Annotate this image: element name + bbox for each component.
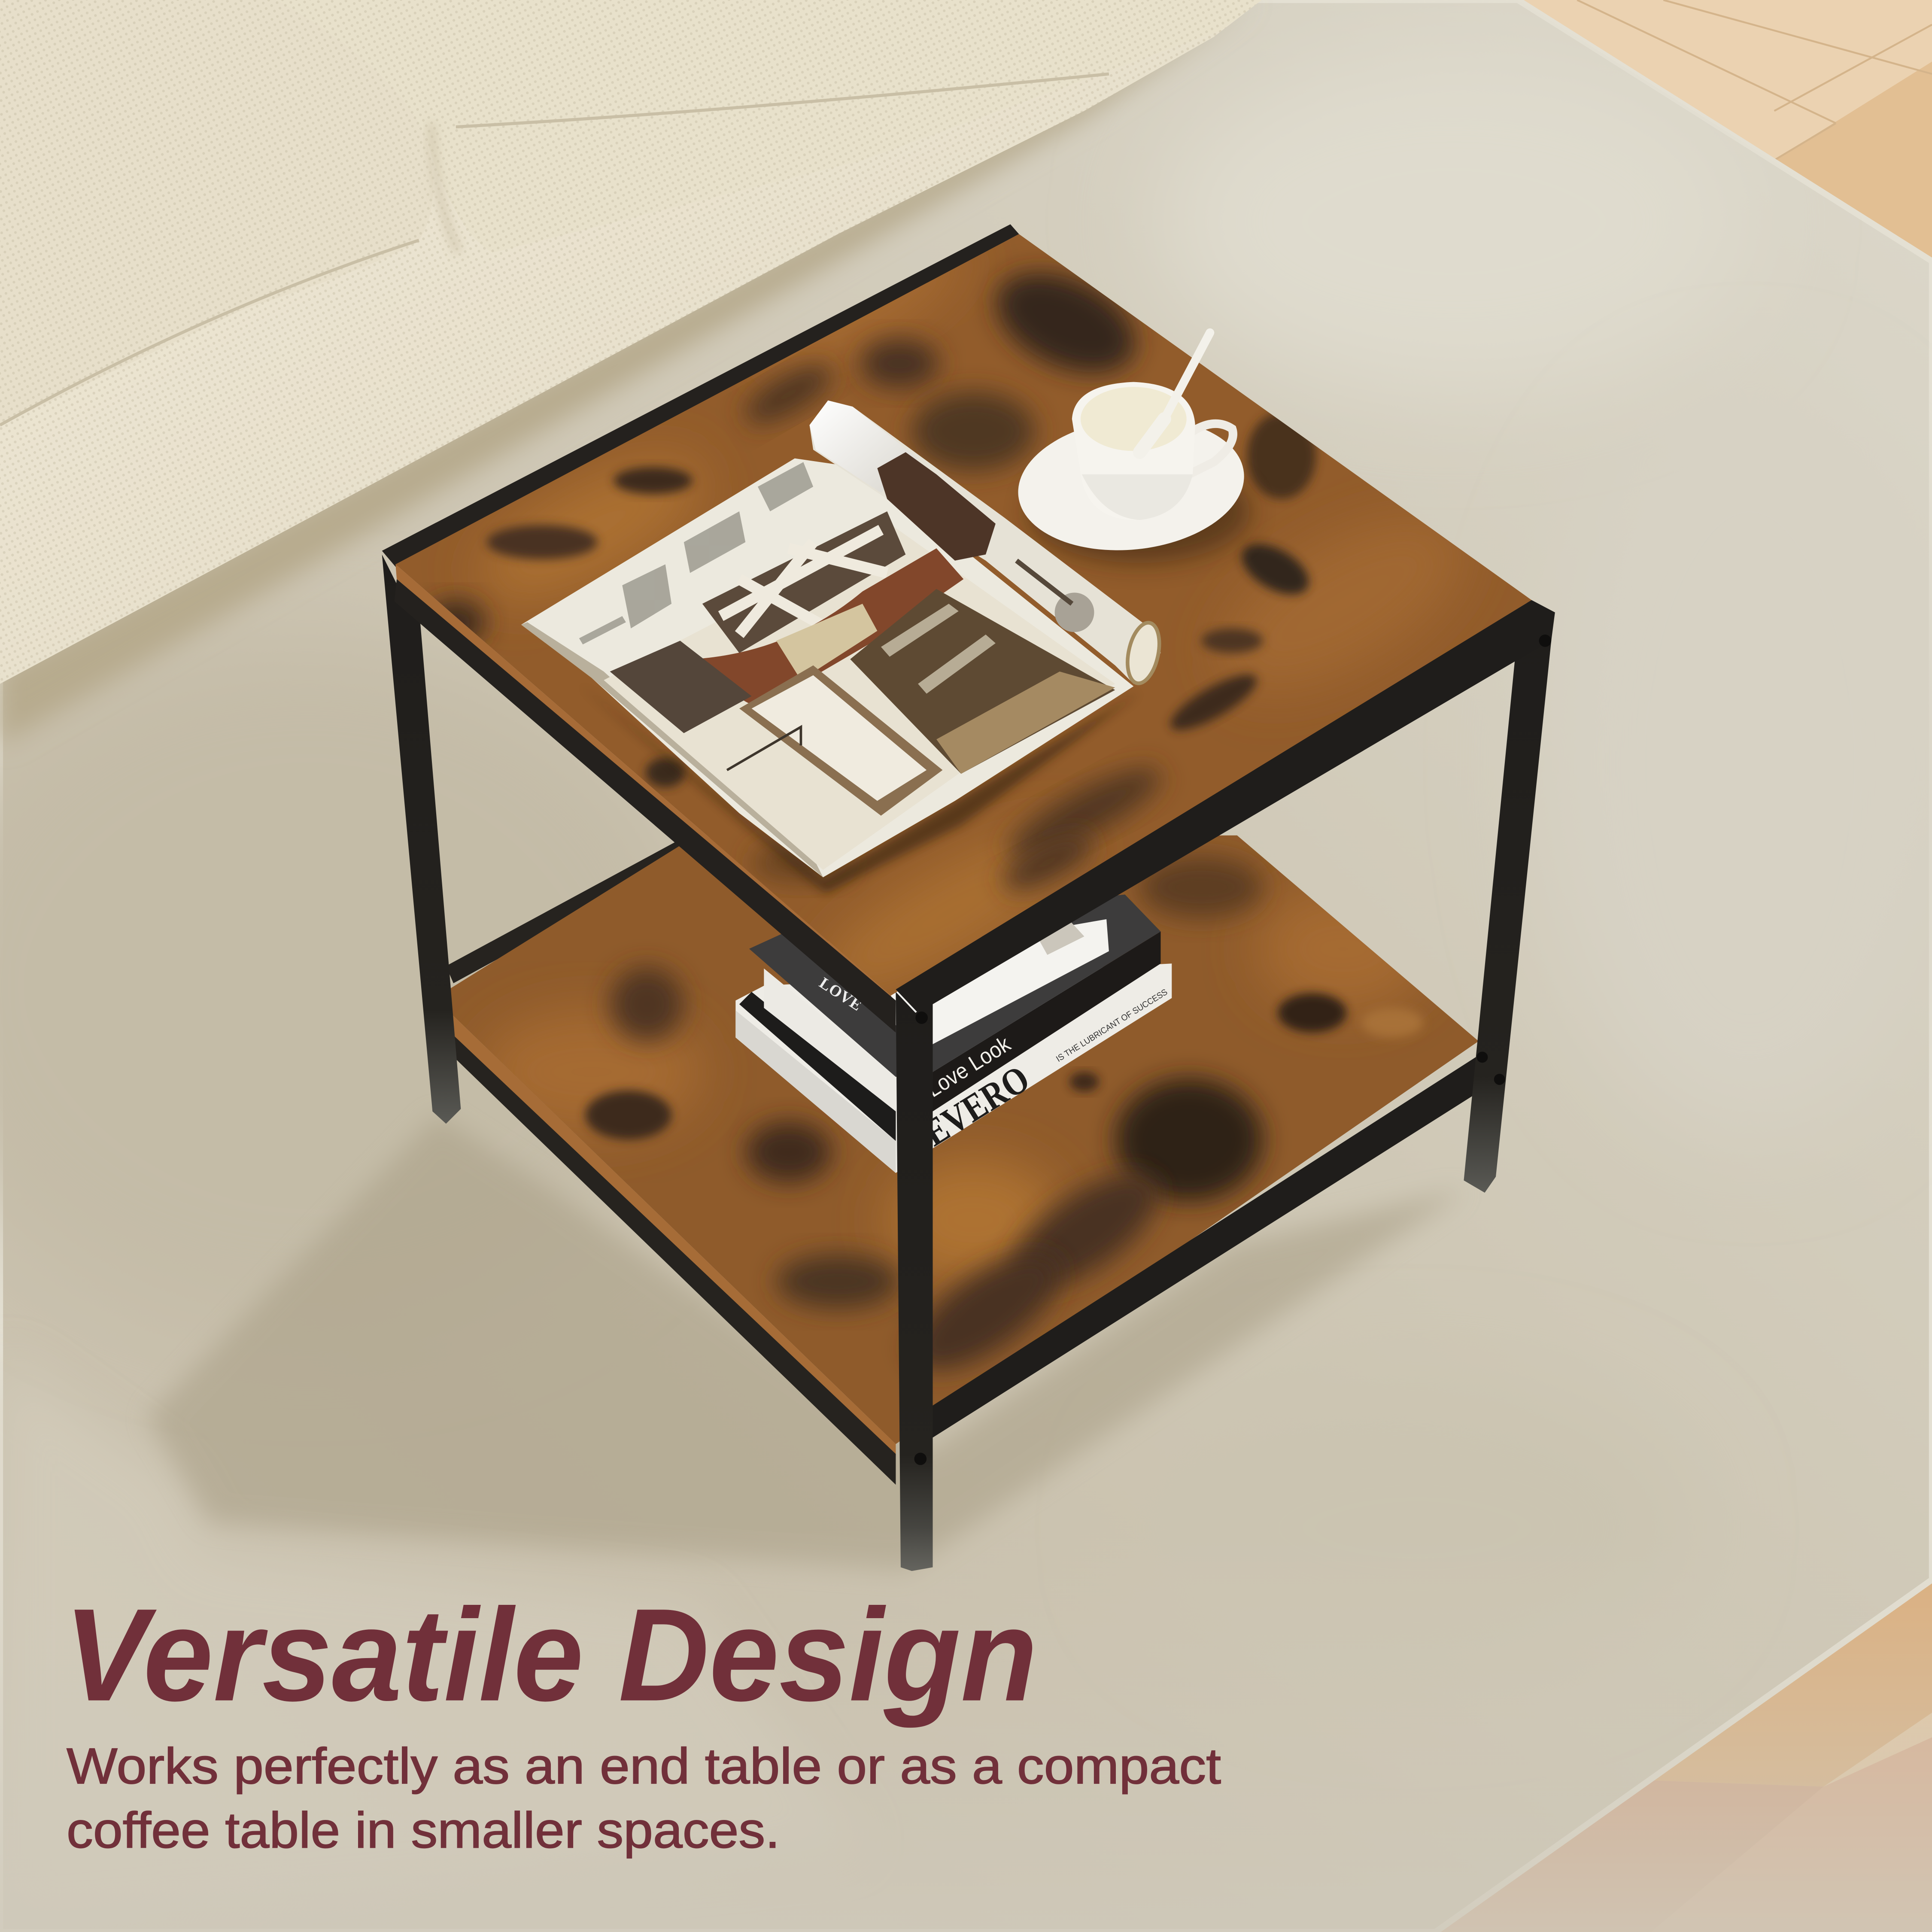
description [67,1738,1221,1858]
gilded console [936,671,1115,774]
picture background [604,517,1115,870]
magazine pages [521,459,1133,877]
spoon [1164,333,1210,419]
back frame rail [382,224,1019,567]
rolled page [810,401,1164,686]
floor lamp sketch [727,727,801,770]
table top [382,217,1531,1023]
left page text columns [579,462,813,644]
zigzag white beams [702,511,905,653]
screws [914,635,1551,1465]
upper book text: LOVE [816,974,865,1015]
sofa back cushion [265,0,1262,252]
wood front left edge [395,564,893,1000]
cup body [1072,382,1195,520]
left front rail of lower shelf [435,1018,896,1485]
coffee cup and saucer [1012,333,1251,561]
table shadow on rug [148,1115,1466,1571]
right front frame rail [896,600,1555,1013]
description: coffee table in smaller spaces. [67,1801,780,1858]
dark cabinet [610,641,752,733]
sofa [0,0,1262,684]
saucer [1012,407,1251,561]
wood grain blotches [426,217,1491,1023]
lower shelf back rail [446,835,693,983]
shadows of objects on table [579,459,1251,893]
bookshelf [850,589,1115,774]
leather sofa [693,548,963,708]
bottom haze overlay [0,1528,1932,1932]
bottom book text: IS THE LUBRICANT OF SUCCESS [1054,987,1169,1064]
sofa shadow on rug [0,0,1257,745]
left leg [382,554,461,1124]
framed window [739,665,942,816]
lower shelf [435,835,1479,1456]
left front frame rail [394,579,896,1033]
right front rail of lower shelf [930,1050,1491,1439]
cup handle [1189,424,1233,474]
title: Versatile Design [64,1581,1037,1729]
magazine [521,401,1164,877]
sofa seat cushion [0,0,433,425]
bottom book text [916,987,1169,1154]
right leg [1464,612,1555,1193]
upper book [749,895,1160,1112]
description: Works perfectly as an end table or as a compact [67,1738,1221,1794]
bottom book [735,963,1172,1173]
front leg [896,992,933,1571]
bottom book text: EVERO [916,1057,1037,1154]
stacked books [735,895,1172,1173]
upper book: Love Look [922,1031,1015,1102]
